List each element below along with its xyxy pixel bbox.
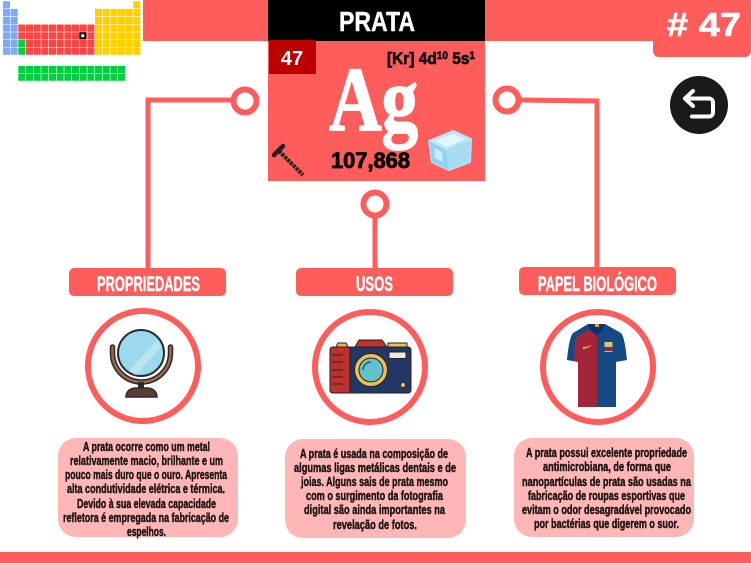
title: PRATA — [339, 6, 415, 37]
connector: properties — [148, 90, 256, 268]
text: papel biologico: evitam o odor desagradável provocado — [522, 503, 691, 517]
text: propriedades: relativamente macio, brilhante e um — [70, 454, 223, 468]
text: propriedades: pouco mais duro que o ouro. Apresenta — [65, 468, 228, 482]
text: usos: A prata é usada na composição de — [300, 447, 448, 461]
heading: papel biologico — [519, 267, 676, 296]
bottom bar — [0, 552, 751, 563]
text: propriedades: refletora é empregada na fabricação de — [63, 511, 229, 525]
icon: football shirt — [543, 312, 653, 422]
text: papel biologico: antimicrobiana, de forma que — [543, 460, 671, 474]
panel: usos — [285, 268, 466, 538]
text: papel biologico: A prata possui excelente propriedade — [526, 446, 687, 460]
heading: usos — [296, 268, 453, 296]
atomic number: 47 — [281, 48, 303, 70]
heading: propriedades — [69, 268, 226, 296]
electron configuration: 1 — [469, 50, 475, 62]
icon: back button — [670, 76, 728, 134]
text: usos: digital são ainda importantes na — [304, 503, 446, 517]
connector: uses — [364, 192, 386, 268]
icon: mirror — [88, 311, 198, 421]
text: papel biologico — [514, 438, 694, 537]
text: papel biologico: fabricação de roupas esportivas que — [528, 489, 685, 503]
text: propriedades — [58, 438, 238, 539]
heading: propriedades: PROPRIEDADES — [97, 273, 200, 296]
electron configuration: 5s — [448, 49, 469, 68]
text: propriedades: Devido à sua elevada capacidade — [77, 497, 216, 511]
element number tab: # 47 — [667, 6, 741, 43]
electron configuration: 10 — [437, 50, 448, 62]
periodic table locator — [3, 5, 141, 77]
text: usos: revelação de fotos. — [333, 518, 417, 532]
text: propriedades: A prata ocorre como um metal — [83, 440, 210, 454]
atomic mass: 107,868 — [331, 148, 410, 173]
text: papel biologico: por bactérias que digerem o suor. — [534, 517, 679, 531]
text: propriedades: espelhos. — [127, 525, 166, 539]
icon: screw — [274, 146, 303, 175]
panel: element card — [268, 40, 485, 181]
panel: propriedades — [58, 268, 238, 539]
text: propriedades: alta condutividade elétrica e térmica. — [67, 482, 225, 496]
heading: usos: USOS — [356, 273, 393, 296]
electron configuration: [Kr] 4d — [387, 49, 442, 68]
text: usos: com o surgimento da fotografia — [306, 489, 444, 503]
text: usos: algumas ligas metálicas dentais e de — [294, 461, 456, 475]
text: usos — [285, 439, 466, 538]
element symbol: Ag — [329, 49, 418, 150]
top banner — [143, 0, 751, 57]
connector: biological role — [496, 88, 597, 267]
icon: camera — [315, 312, 425, 422]
icon: ice cube — [429, 131, 471, 170]
text: papel biologico: nanopartículas de prata são usadas na — [522, 475, 692, 489]
atomic number — [269, 40, 316, 74]
heading: papel biologico: PAPEL BIOLÓGICO — [538, 272, 657, 296]
text: usos: joias. Alguns sais de prata mesmo — [300, 475, 448, 489]
panel: papel biologico — [514, 267, 694, 537]
